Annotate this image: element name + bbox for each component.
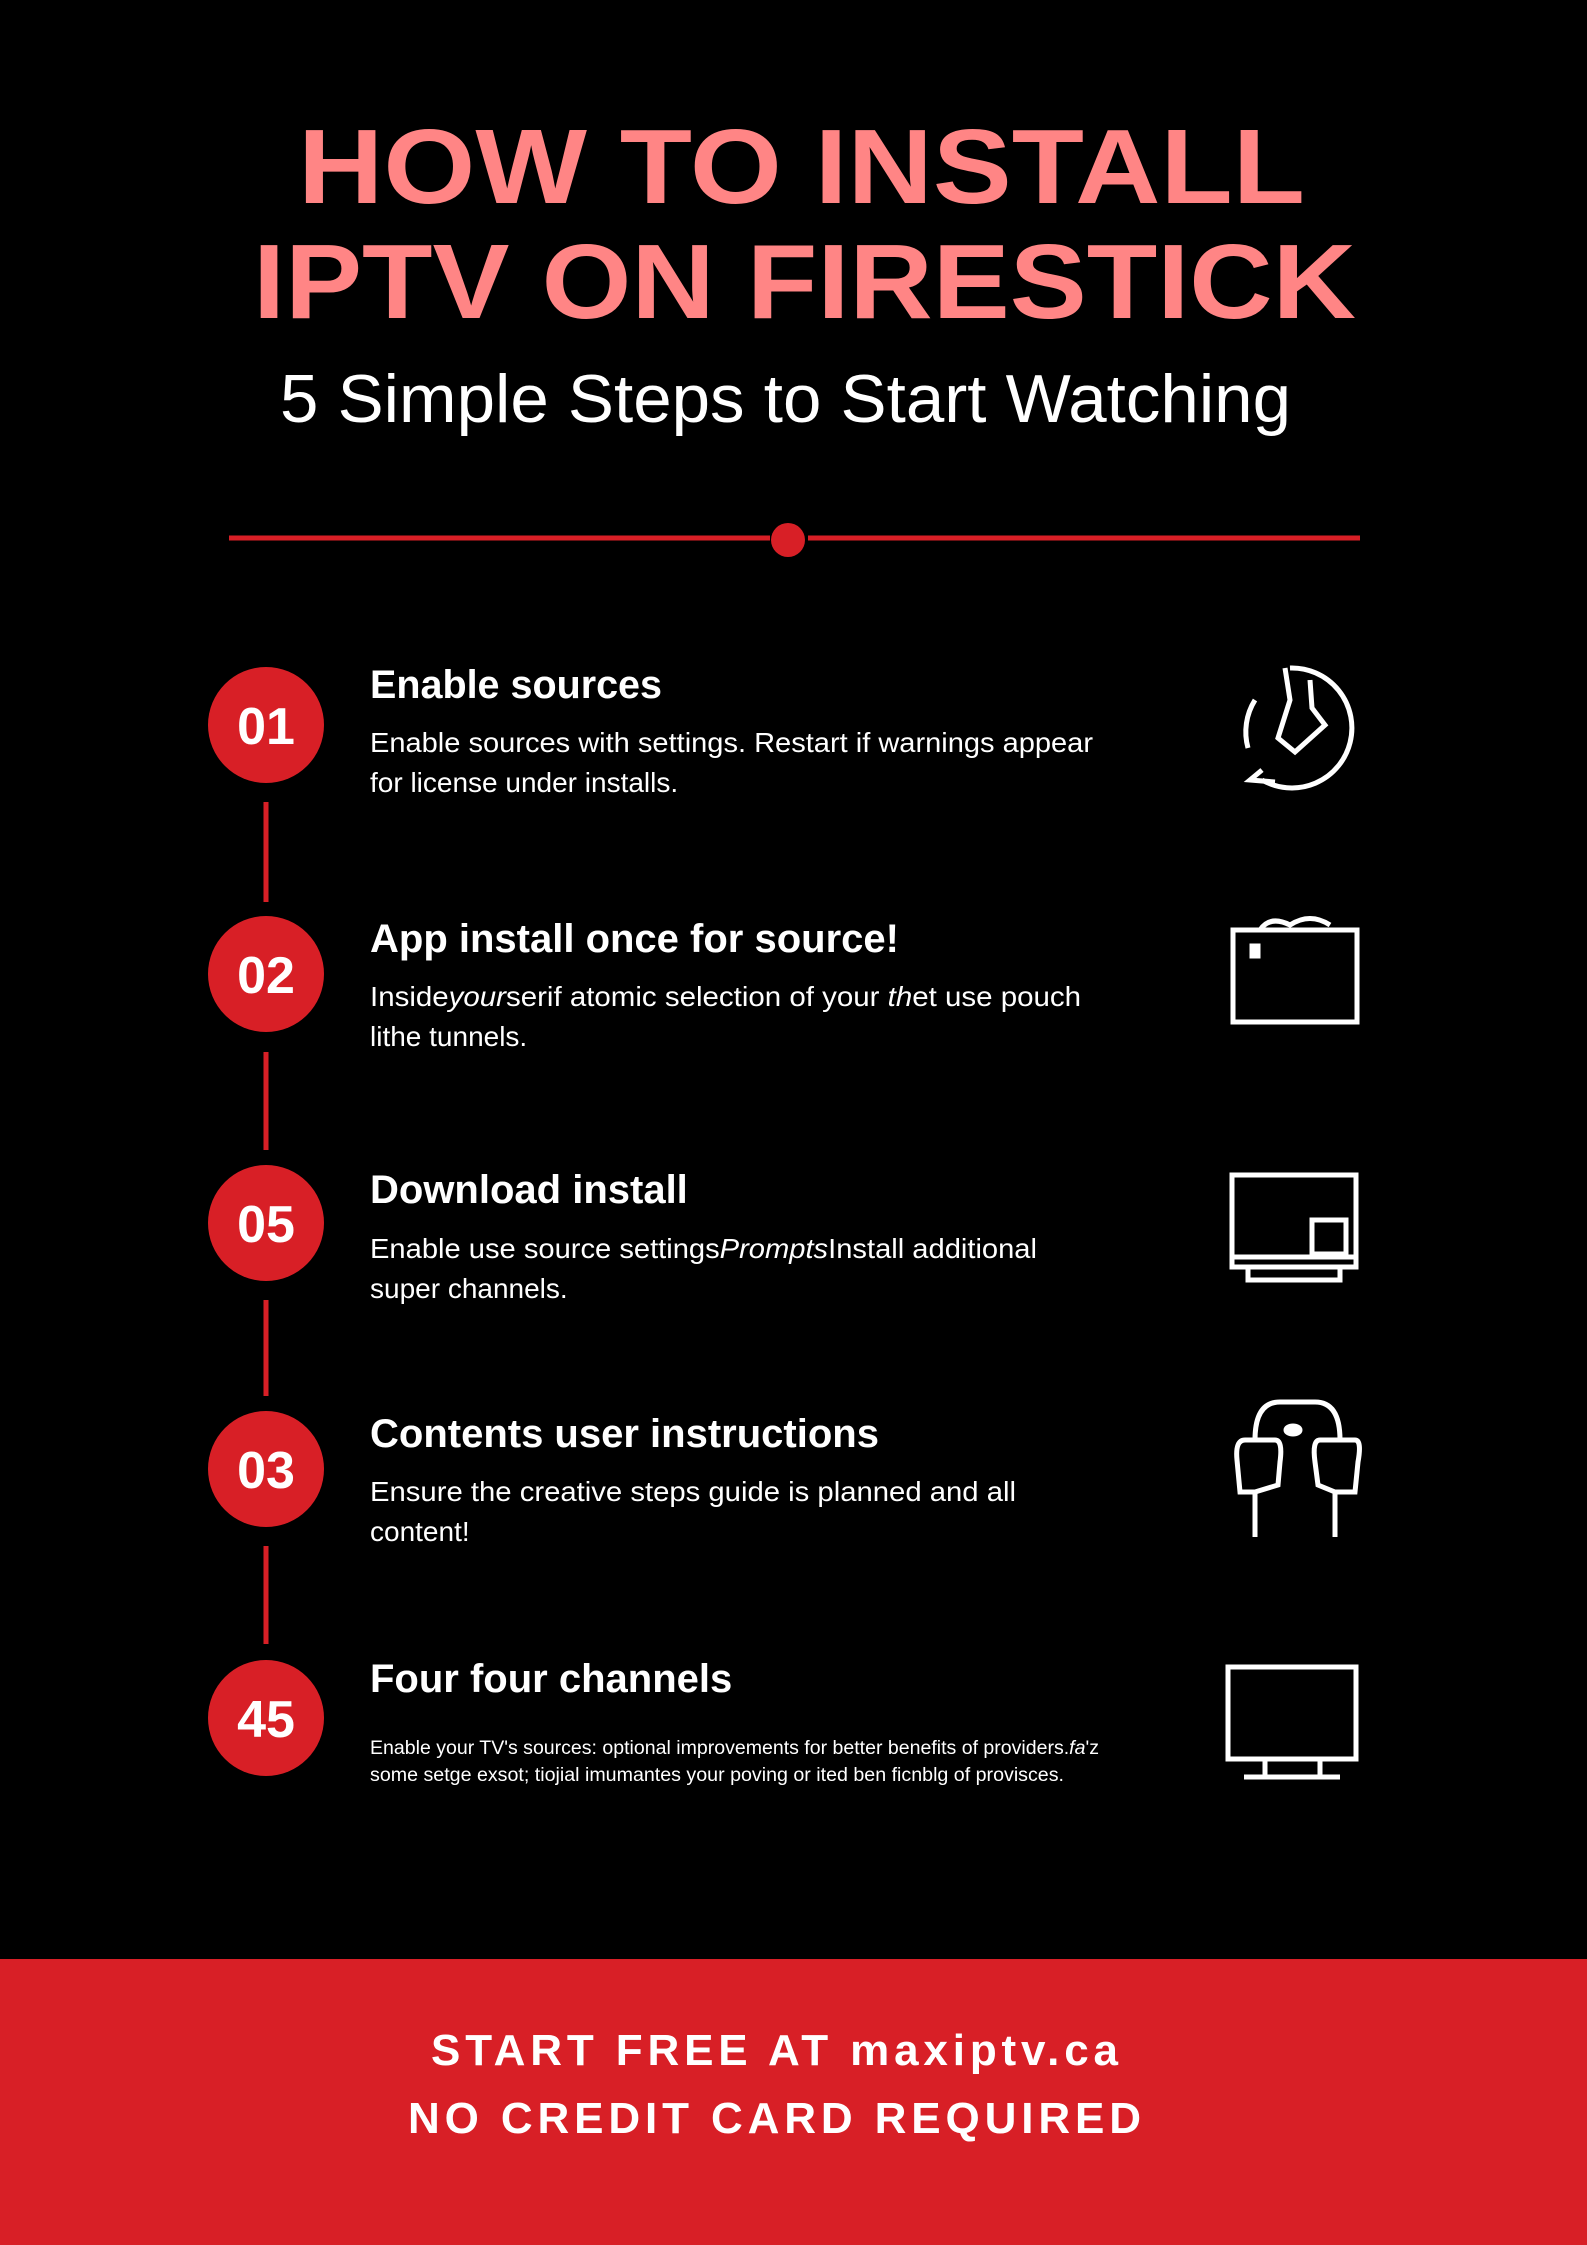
step 2 bbox=[208, 916, 1081, 1052]
step 1: Enable sources with settings. Restart if warnings appear bbox=[370, 727, 1093, 758]
step 1: Enable sources bbox=[370, 663, 662, 707]
step 1: 01 bbox=[237, 698, 295, 756]
footer banner: START FREE AT maxiptv.ca bbox=[431, 2026, 1119, 2075]
step 5: Enable your TV's sources: optional improvements for better benefits of providers. fa'z bbox=[370, 1738, 1099, 1759]
step 1 bbox=[208, 663, 1093, 798]
step 5: 45 bbox=[237, 1691, 295, 1749]
divider bbox=[229, 523, 1360, 557]
icon: box bbox=[1233, 918, 1357, 1022]
title: HOW TO INSTALL bbox=[298, 108, 1305, 226]
step 5 bbox=[208, 1657, 1099, 1786]
step 1: for license under installs. bbox=[370, 767, 678, 798]
step 3: super channels. bbox=[370, 1273, 568, 1304]
title: IPTV ON FIRESTICK bbox=[253, 223, 1356, 341]
step 4: Contents user instructions bbox=[370, 1412, 879, 1456]
step 3: 05 bbox=[237, 1196, 295, 1254]
icon: clock refresh bbox=[1246, 668, 1352, 788]
subtitle: 5 Simple Steps to Start Watching bbox=[280, 361, 1291, 437]
icons bbox=[1228, 668, 1359, 1777]
footer banner: NO CREDIT CARD REQUIRED bbox=[408, 2094, 1141, 2143]
step 4: 03 bbox=[237, 1442, 295, 1500]
step 5: Four four channels bbox=[370, 1657, 732, 1701]
step 5: some setge exsot; tiojial imumantes your poving or ited ben ficnblg of provisces. bbox=[370, 1765, 1064, 1786]
step 2: 02 bbox=[237, 947, 295, 1005]
timeline connectors bbox=[264, 802, 268, 1644]
title bbox=[253, 108, 1356, 341]
step 4: Ensure the creative steps guide is planned and all bbox=[370, 1476, 1016, 1507]
step 2: App install once for source! bbox=[370, 917, 899, 961]
step 4 bbox=[208, 1411, 1016, 1547]
icon: figure bbox=[1237, 1402, 1359, 1537]
step 2: Insideyourserif atomic selection of your thet use pouch bbox=[370, 981, 1081, 1012]
step 2: lithe tunnels. bbox=[370, 1021, 527, 1052]
step 3 bbox=[208, 1165, 1037, 1304]
footer banner bbox=[0, 1959, 1587, 2245]
icon: tv bbox=[1228, 1667, 1356, 1777]
step 3: Download install bbox=[370, 1168, 688, 1212]
step 3: Enable use source settings PromptsInstall additional bbox=[370, 1233, 1037, 1264]
step 4: content! bbox=[370, 1516, 470, 1547]
icon: tv with window bbox=[1232, 1175, 1356, 1280]
